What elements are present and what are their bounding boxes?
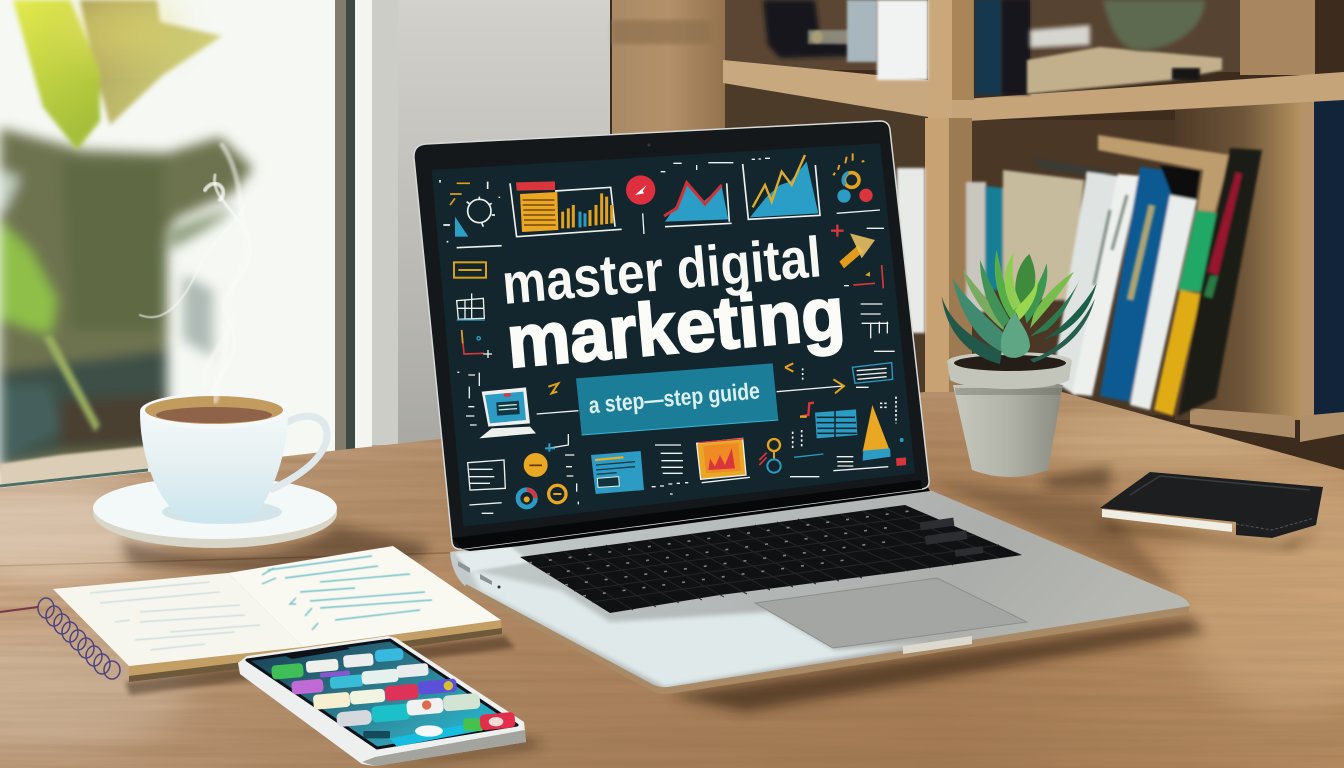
icon: red pin [626,175,655,234]
laptop base [450,490,1190,689]
app icons [271,648,516,747]
chart: yellow trend line [743,155,820,219]
sunlit area of the base [470,570,930,687]
potted succulent [942,249,1097,477]
screen background [432,143,915,527]
right modifier keys [920,518,983,557]
upright books [897,135,1262,416]
chart: red trend line [661,163,733,227]
base front edge [464,584,1190,694]
icon: data table and cone [800,397,906,466]
laptop screen content [432,143,915,527]
bookmark ribbon [0,607,38,612]
keyboard [520,505,1022,613]
subtitle banner: a step—step guide [588,377,761,418]
icon: axis corner [462,330,492,358]
camera dot [648,144,650,146]
laptop lid and bezel [414,121,929,549]
arrow from banner [537,363,844,414]
notebook page edge [129,620,502,680]
wall [340,0,620,500]
window frame [335,0,398,455]
front notch [903,636,972,654]
icon: list bottom left [468,434,578,513]
trackpad [755,578,1027,648]
hinge [455,486,930,551]
icon: rings [759,439,781,473]
wood back panel [610,0,1344,470]
icon: bottom right marks [790,430,888,477]
icon: browser window [591,451,644,494]
steam [140,145,250,400]
icon: coin and round badges [518,453,566,507]
window with blurred plant [0,0,345,490]
icon: text lines [652,445,688,494]
right page [228,546,501,647]
silver laptop [414,121,1190,694]
window sill [0,446,148,486]
notch [283,646,350,659]
wooden desk [0,380,1344,768]
handwriting right page [262,556,432,630]
spiral binding [38,598,120,679]
black leather notebook [1100,472,1323,538]
icon: yellow frame [454,262,486,278]
book spine titles [1094,195,1152,300]
icon: gear and scatter top left [440,180,502,248]
left page [53,573,303,666]
shelf boards and posts [723,60,928,117]
icon: report with bar chart [510,181,622,237]
pot [947,352,1072,477]
smartphone [238,636,526,766]
bookshelf [610,0,1344,470]
cup body [140,412,288,523]
phone body [238,636,526,766]
keyboard legends [529,510,917,596]
icon: megaphone [831,225,883,288]
icon: desktop monitor [457,372,536,438]
shadows on the desk [120,465,1320,768]
icon: wireframe table [457,293,485,320]
phone screen [247,640,517,748]
saucer [93,477,337,548]
cup rim and coffee [140,393,288,429]
items on top shelf [763,0,853,58]
succulent leaves [942,249,1097,364]
side ports [458,561,500,588]
cup handle [270,416,327,490]
icon: pie and dots [833,153,884,228]
spiral notebook with handwritten notes [0,546,502,682]
icon: text list top right [852,304,895,387]
heading line one: master digital [500,225,824,317]
handwriting left page [90,582,260,650]
blurred foliage [0,128,253,470]
coffee cup on saucer with steam [93,145,337,548]
heading line two: marketing [503,271,848,383]
subtitle banner [576,363,778,435]
icon: orange chart card [697,438,750,483]
